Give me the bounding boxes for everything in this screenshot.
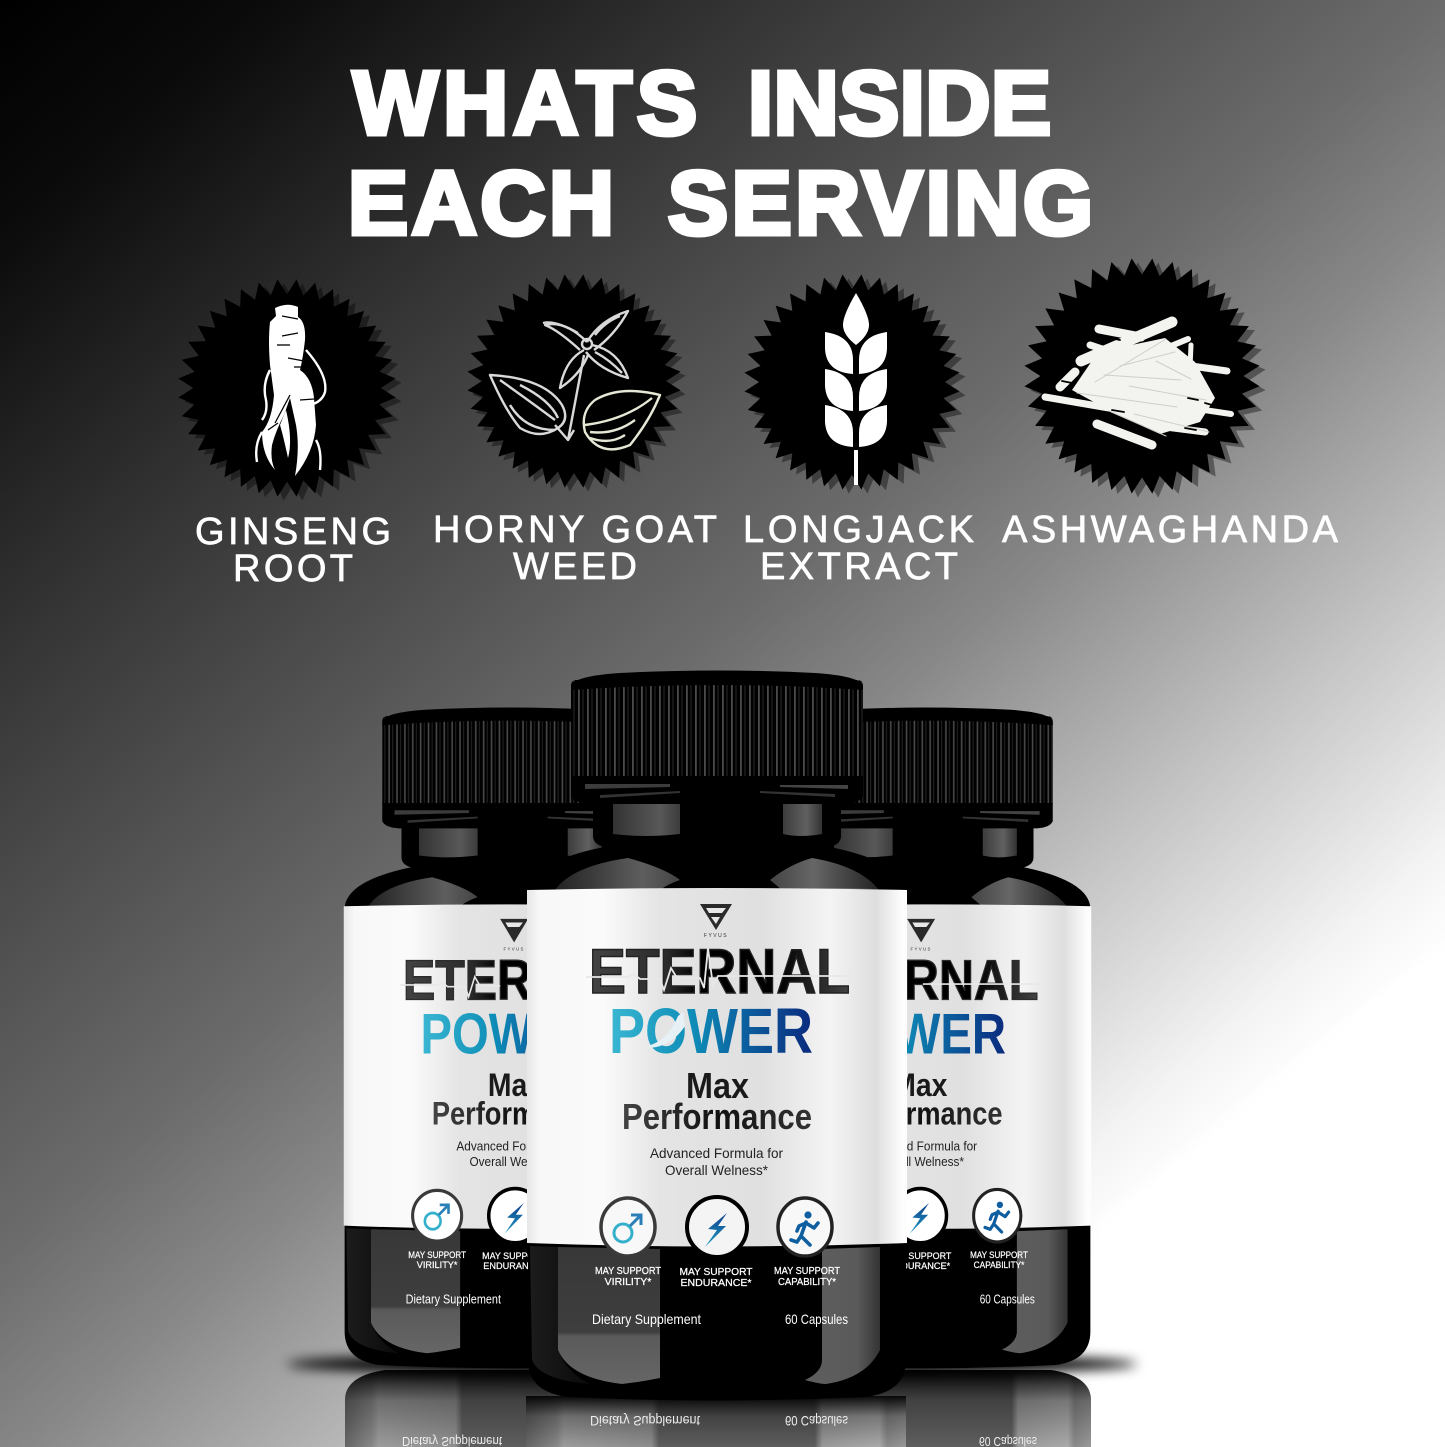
icon: ginseng	[256, 305, 325, 476]
ingredient: ginseng root	[169, 270, 411, 510]
icon: endurance	[687, 1197, 747, 1257]
right bottle label contents: MAY SUPPORT	[887, 1251, 952, 1261]
reflection: center bottle: 60 Capsules	[785, 1413, 848, 1429]
left bottle label contents: Dietary Supplement	[406, 1292, 501, 1307]
subtitle	[650, 1145, 783, 1178]
left bottle label contents: Performance	[432, 1095, 598, 1131]
left bottle label contents: Max	[488, 1067, 543, 1103]
ingredient labels: HORNY GOAT	[433, 509, 717, 551]
reflection: center bottle: Dietary Supplement	[590, 1413, 700, 1429]
right bottle label contents: Advanced Formula for	[861, 1139, 977, 1154]
white floor wedge	[1095, 945, 1445, 1447]
icon: ashwagandha root sticks	[1045, 322, 1231, 445]
left bottle label contents: VIRILITY*	[417, 1260, 458, 1270]
ingredient labels: LONGJACK	[743, 509, 974, 551]
subtitle: Overall Welness*	[665, 1162, 769, 1178]
right bottle label contents: Max	[892, 1067, 948, 1103]
ingredient labels: ROOT	[233, 548, 353, 590]
benefit captions: CAPABILITY*	[778, 1276, 836, 1288]
title: INSIDE	[748, 54, 1051, 154]
footer: capsule count: 60 Capsules	[785, 1311, 848, 1327]
title: SERVING	[668, 154, 1093, 254]
benefit captions: ENDURANCE*	[680, 1277, 752, 1289]
ingredient labels: EXTRACT	[760, 546, 958, 588]
benefit captions	[595, 1265, 841, 1289]
brand logo: FYVUS	[704, 933, 728, 939]
title: WHATS	[353, 54, 697, 154]
benefit captions: MAY SUPPORT	[595, 1265, 662, 1277]
left bottle label contents: Overall Welness*	[470, 1155, 560, 1169]
ingredient labels: ASHWAGHANDA	[1002, 509, 1339, 551]
ingredient: longjack extract	[735, 265, 975, 503]
bottle: center	[527, 670, 907, 1400]
right bottle label contents: MAY SUPPORT	[970, 1250, 1028, 1260]
wordmark: power: POWER	[609, 995, 813, 1067]
right bottle label contents: ETERNAL	[810, 948, 1038, 1012]
right bottle label contents: 60 Capsules	[980, 1292, 1035, 1307]
icon: capability	[778, 1198, 832, 1256]
right bottle label contents: FYVUS	[911, 946, 932, 952]
ingredient: ashwaghanda	[1014, 248, 1276, 508]
left bottle label contents: POWER	[420, 1002, 599, 1067]
title: EACH	[348, 154, 614, 254]
ingredient: horny goat weed	[458, 265, 695, 501]
right bottle label contents: Overall Welness*	[874, 1155, 964, 1169]
benefit captions: VIRILITY*	[605, 1276, 651, 1288]
right bottle label contents: CAPABILITY*	[974, 1260, 1025, 1270]
wordmark: eternal: ETERNAL	[589, 937, 850, 1007]
left bottle label contents: Advanced Formula for	[456, 1139, 573, 1154]
right bottle label contents: Performance	[836, 1095, 1003, 1131]
bottle: right	[759, 708, 1091, 1368]
footer: dietary supplement: Dietary Supplement	[592, 1311, 701, 1327]
left bottle label contents: MAY SUPPORT	[482, 1251, 546, 1261]
product name: Performance	[622, 1096, 812, 1137]
subtitle: Advanced Formula for	[650, 1145, 783, 1161]
icon: wheat	[825, 293, 887, 485]
floor shadow	[287, 1352, 1137, 1376]
reflection: right bottle	[760, 1370, 1091, 1447]
ingredient labels	[195, 509, 1339, 590]
left bottle label contents	[400, 919, 631, 1307]
reflection: center bottle	[526, 1396, 906, 1447]
icon: flower and leaves	[490, 311, 660, 449]
title	[348, 54, 1093, 254]
right bottle label contents	[810, 919, 1040, 1307]
ingredient labels: GINSENG	[195, 511, 391, 553]
product name	[622, 1065, 812, 1137]
product name: Max	[686, 1065, 749, 1106]
icon: virility	[601, 1198, 655, 1256]
right bottle label contents: POWER	[828, 1002, 1006, 1067]
left bottle label contents: FYVUS	[504, 946, 525, 952]
ingredient labels: WEED	[513, 546, 637, 588]
bottle: left	[344, 708, 676, 1368]
brand logo	[700, 904, 732, 939]
reflection: left bottle	[345, 1370, 680, 1447]
benefit captions: MAY SUPPORT	[680, 1266, 753, 1278]
benefit captions: MAY SUPPORT	[774, 1265, 841, 1277]
right bottle label contents: ENDURANCE*	[889, 1261, 951, 1271]
left bottle label contents: MAY SUPPORT	[408, 1250, 466, 1260]
left bottle label contents: ENDURANCE*	[483, 1261, 545, 1271]
left bottle label contents: ETERNAL	[403, 948, 631, 1012]
